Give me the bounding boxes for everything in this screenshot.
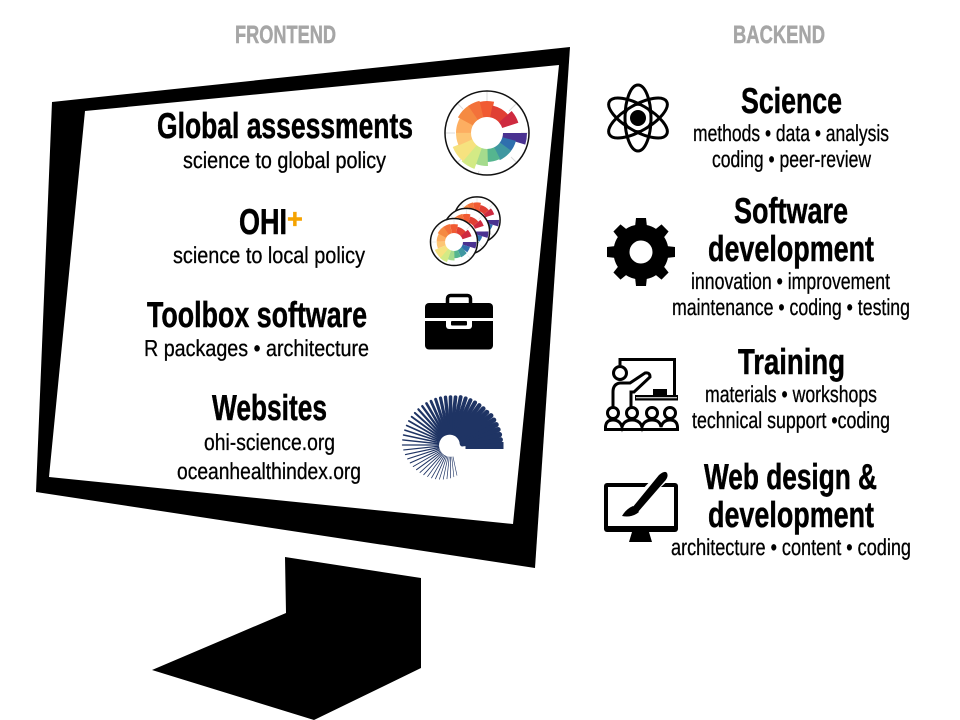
text: materials, workshops: materials • workshops <box>705 381 877 407</box>
monitor stand and base <box>152 557 421 720</box>
icon: monitor with paintbrush <box>604 470 678 542</box>
heading: frontend: FRONTEND <box>235 21 336 49</box>
text: technical support, coding: technical support •coding <box>692 407 890 433</box>
icon: fan logo <box>402 397 504 479</box>
heading: OHI plus: + <box>287 204 303 234</box>
heading: development: development <box>708 228 874 269</box>
panel: global assessments <box>157 91 529 175</box>
icon: three overlapping flower plots <box>430 197 500 266</box>
text: methods, data, analysis: methods • data • analysis <box>693 120 889 146</box>
text: R packages and architecture: R packages • architecture <box>144 335 369 361</box>
heading: backend: BACKEND <box>733 21 825 49</box>
icon: teacher with audience <box>606 360 678 430</box>
icon: toolbox <box>425 296 493 350</box>
icon: atom <box>603 85 673 151</box>
panel: training <box>606 341 890 433</box>
icon: gear <box>607 218 675 286</box>
text: ohi-science.org: ohi-science.org <box>204 429 335 455</box>
icon: flower plot <box>445 91 529 175</box>
panel: software development <box>607 190 910 320</box>
panel: web design and development <box>604 456 911 560</box>
heading: web design and: Web design & <box>704 456 877 497</box>
text: innovation, improvement: innovation • improvement <box>691 268 890 294</box>
monitor frame <box>36 47 570 568</box>
heading: websites: Websites <box>212 387 327 428</box>
text: coding, peer-review: coding • peer-review <box>712 146 871 172</box>
heading: software: Software <box>734 190 848 231</box>
heading: training: Training <box>738 341 845 382</box>
text: oceanhealthindex.org: oceanhealthindex.org <box>177 458 361 484</box>
heading: toolbox software: Toolbox software <box>147 294 367 335</box>
text: science to local policy: science to local policy <box>173 242 365 268</box>
heading: global assessments: Global assessments <box>157 105 413 146</box>
monitor screen <box>49 65 559 524</box>
heading: science: Science <box>741 80 842 121</box>
panel: websites <box>177 387 504 484</box>
heading: OHI plus: OHI <box>239 201 287 242</box>
monitor illustration <box>36 47 570 720</box>
panel: OHI+ <box>173 197 500 268</box>
text: science to global policy: science to global policy <box>183 147 386 173</box>
panel: science <box>603 80 889 172</box>
panel: toolbox software <box>144 294 493 361</box>
heading: development: development <box>708 494 874 535</box>
